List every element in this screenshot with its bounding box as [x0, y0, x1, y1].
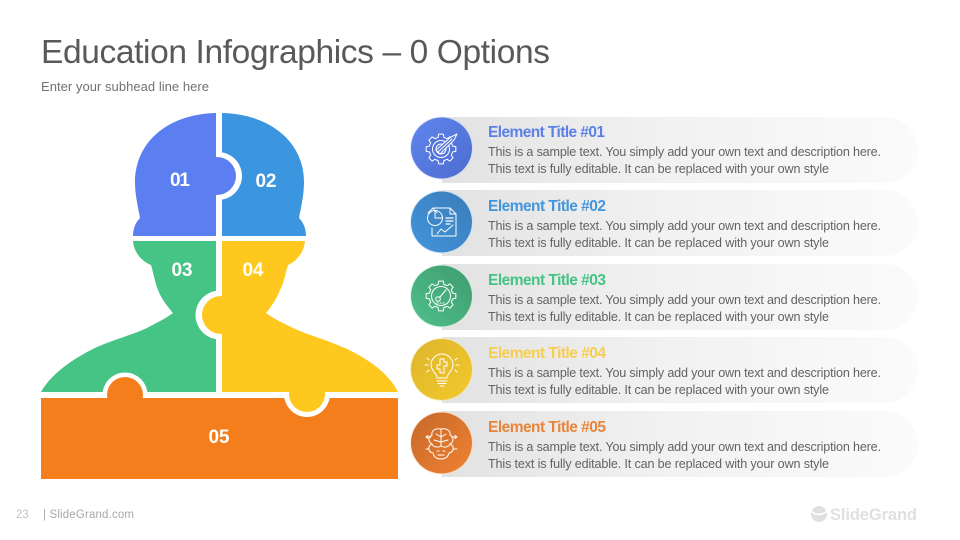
band	[442, 117, 918, 183]
icon: report	[428, 208, 456, 236]
row 3: This text is fully editable. It can be replaced with your own style	[488, 310, 829, 324]
puzzle figure	[41, 113, 398, 479]
title: Element Title #03	[488, 272, 606, 289]
icon: gauge gear	[426, 281, 456, 311]
piece 01	[133, 113, 236, 236]
text: This is a sample text. You simply add your own text and description here.	[488, 293, 881, 307]
row 2: This text is fully editable. It can be replaced with your own style	[488, 236, 829, 250]
title: Element Title #04	[488, 345, 606, 362]
piece numbers	[170, 170, 276, 448]
piece 03	[41, 241, 244, 392]
title: Element Title #05	[488, 419, 606, 436]
band	[442, 264, 918, 330]
band	[442, 337, 918, 403]
icon: light bulb	[425, 354, 459, 386]
row 1: This text is fully editable. It can be replaced with your own style	[488, 162, 829, 176]
logo: SlideGrand	[830, 506, 917, 524]
icon circle	[410, 264, 473, 328]
piece numbers: 05	[208, 427, 230, 448]
title: Element Title #01	[488, 124, 605, 141]
title: Education Infographics – 0 Options	[41, 34, 550, 71]
title: Element Title #02	[488, 198, 606, 215]
text: This is a sample text. You simply add your own text and description here.	[488, 440, 881, 454]
row 5: This text is fully editable. It can be replaced with your own style	[488, 457, 829, 471]
footer page number and site: | SlideGrand.com	[43, 509, 134, 521]
piece 05	[41, 371, 398, 479]
piece 04	[202, 241, 398, 412]
icon: gear and pen	[426, 134, 457, 164]
piece numbers: 03	[172, 260, 192, 281]
icon circle	[410, 412, 473, 474]
row 3	[410, 264, 918, 330]
piece numbers: 02	[256, 171, 276, 192]
row 1	[410, 116, 918, 183]
band	[442, 190, 918, 256]
icon circle	[410, 190, 473, 254]
piece 02	[194, 113, 306, 236]
piece numbers: 01	[170, 170, 190, 191]
text: This is a sample text. You simply add your own text and description here.	[488, 219, 881, 233]
piece numbers: 04	[242, 260, 264, 281]
footer page number and site: 23	[16, 509, 29, 521]
icon circle	[410, 116, 473, 180]
text: This is a sample text. You simply add your own text and description here.	[488, 145, 881, 159]
icon: brain and head	[426, 429, 457, 459]
row 5	[410, 411, 918, 477]
row 4	[410, 337, 918, 403]
icon circle	[410, 338, 473, 401]
row 4: This text is fully editable. It can be replaced with your own style	[488, 383, 829, 397]
band	[442, 411, 918, 477]
subhead: Enter your subhead line here	[41, 79, 209, 94]
row 2	[410, 190, 918, 256]
text: This is a sample text. You simply add your own text and description here.	[488, 366, 881, 380]
